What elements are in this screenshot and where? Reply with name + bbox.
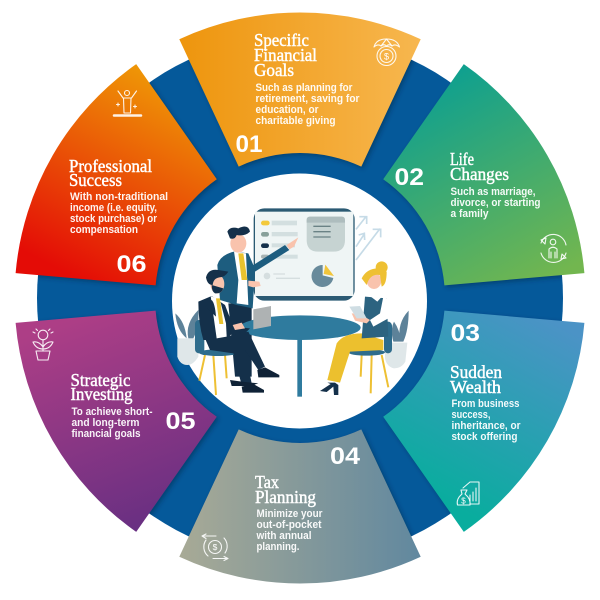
illustration: business meeting — [175, 208, 409, 397]
heading 01: Financial — [254, 45, 317, 65]
heading 03: Wealth — [450, 377, 501, 397]
left plant — [175, 310, 198, 365]
round table — [239, 315, 361, 397]
number 04: 04 — [330, 443, 360, 470]
body 04: out-of-pocket — [256, 519, 322, 531]
icon: plant with lightbulb — [33, 329, 53, 360]
body 03: From business — [452, 398, 520, 410]
body 05: To achieve short- — [72, 406, 153, 418]
number 03: 03 — [450, 320, 480, 347]
wedge 01 — [179, 13, 421, 167]
panel: 01 specific financial goals — [179, 13, 421, 167]
heading 01: Goals — [254, 60, 294, 80]
panel: 03 sudden wealth — [383, 311, 584, 532]
body 03: inheritance, or — [452, 420, 521, 432]
number 05: 05 — [166, 408, 196, 435]
icon: person celebrating — [114, 90, 141, 116]
laptop — [253, 306, 271, 329]
heading 04: Planning — [255, 487, 316, 507]
wedge 05 — [16, 311, 217, 532]
body 03: stock offering — [452, 431, 518, 443]
body 06: income (i.e. equity, — [70, 202, 157, 214]
presenter standing — [217, 226, 298, 377]
body 01: retirement, saving for — [256, 93, 360, 105]
presentation board — [254, 208, 355, 301]
right plant — [385, 311, 409, 368]
wedge 03 — [383, 311, 584, 532]
body 01: charitable giving — [256, 115, 336, 127]
number 01: 01 — [236, 131, 262, 158]
number 02: 02 — [394, 164, 424, 191]
heading 03: Sudden — [450, 362, 502, 382]
heading 01: Specific — [254, 30, 309, 50]
body 04: Minimize your — [256, 508, 323, 520]
wedge 04 — [179, 429, 421, 583]
icon: umbrella and coin — [374, 39, 400, 66]
blue ring — [37, 35, 563, 561]
icon: money bag and chart — [457, 482, 479, 506]
icon: person with cycle arrows — [541, 234, 566, 262]
wedge 02 — [383, 64, 584, 285]
heading 06: Success — [69, 170, 122, 190]
body 04: with annual — [256, 530, 312, 542]
panel: 02 life changes — [383, 64, 584, 285]
icon: coin with exchange arrows — [202, 534, 228, 560]
body 06: stock purchase) or — [70, 213, 158, 225]
panel: 06 professional success — [16, 64, 217, 285]
body 05: financial goals — [72, 428, 140, 440]
body 04: planning. — [256, 541, 300, 553]
wedge shadows on ring — [38, 60, 562, 536]
body 01: education, or — [256, 104, 319, 116]
body 02: Such as marriage, — [450, 186, 536, 198]
panel: 05 strategic investing — [16, 311, 217, 532]
body 01: Such as planning for — [256, 82, 353, 94]
seated woman — [320, 261, 392, 395]
heading 04: Tax — [255, 472, 279, 492]
icon: umbrella and coin: $ — [384, 52, 389, 62]
seated man — [195, 270, 279, 395]
white centre circle — [172, 174, 427, 428]
heading 02: Life — [450, 149, 474, 169]
body 03: success, — [452, 409, 490, 421]
icon: coin with exchange arrows: $ — [213, 542, 218, 552]
heading 02: Changes — [450, 164, 509, 184]
body 06: compensation — [70, 224, 138, 236]
body 05: and long-term — [72, 417, 140, 429]
wedge 06 — [16, 64, 217, 285]
growth arrows — [356, 217, 381, 260]
number 06: 06 — [116, 251, 146, 278]
heading 06: Professional — [69, 156, 152, 176]
body 02: a family — [450, 208, 489, 220]
panel: 04 tax planning — [179, 429, 421, 583]
heading 05: Strategic — [70, 370, 131, 390]
icon: money bag and chart: $ — [461, 496, 466, 506]
body 02: divorce, or starting — [450, 197, 540, 209]
heading 05: Investing — [70, 384, 132, 404]
body 06: With non-traditional — [70, 191, 168, 203]
